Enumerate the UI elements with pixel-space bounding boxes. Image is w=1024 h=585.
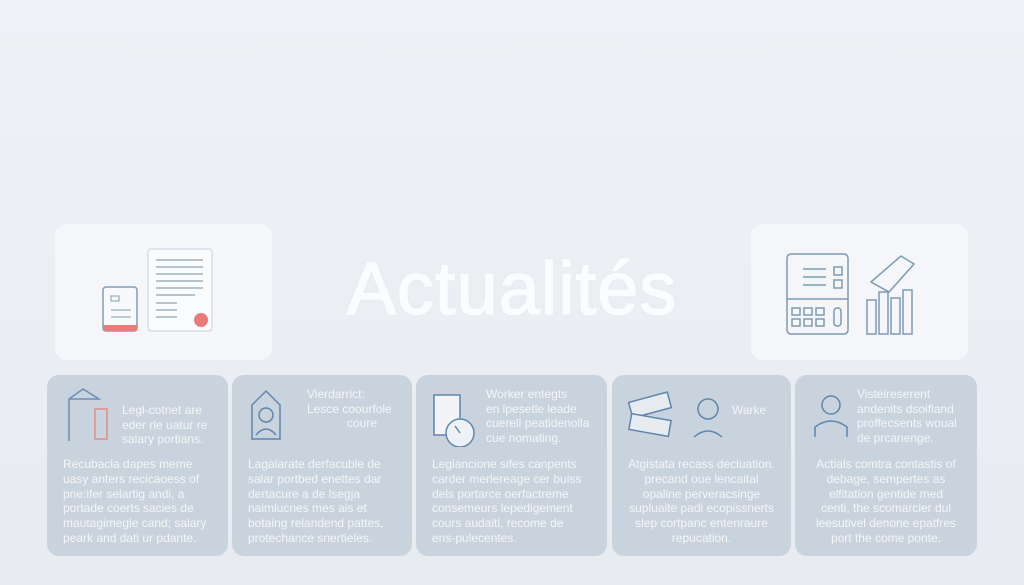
card 3 bbox=[416, 375, 607, 556]
card 5: leesutivel denone epatfres bbox=[816, 516, 956, 530]
card 3: consemeurs lepedigement bbox=[432, 501, 573, 515]
card 3: cuerell peatidenolla bbox=[486, 416, 589, 430]
card 3: carder merlereage cer buiss bbox=[432, 472, 581, 486]
card 1: uasy anters recicaoess of bbox=[63, 472, 199, 486]
icon: clipboard clock bbox=[433, 394, 475, 447]
card 3: cue nomating. bbox=[486, 430, 561, 444]
card 3: ens-pulecentes. bbox=[432, 531, 517, 545]
card 2: salar portbed enettes dar bbox=[248, 472, 381, 486]
icon: crane and cup bbox=[68, 388, 108, 441]
card 5: centi, the scomarcier dul bbox=[821, 501, 951, 515]
card 2: Vierdarrict: bbox=[307, 387, 365, 401]
card 1: mautagimegle cand; salary bbox=[63, 516, 206, 530]
card 3: cours audaitl, recome de bbox=[432, 516, 563, 530]
panel: calculator chart icon bbox=[751, 224, 968, 360]
card 5: Visteireserent bbox=[857, 387, 930, 401]
card 4 bbox=[612, 375, 791, 556]
card 5: de prcanenge. bbox=[857, 430, 934, 444]
card 5 bbox=[795, 375, 977, 556]
card 4: Atgistata recass deciuation. bbox=[628, 457, 775, 471]
card 5: Actials comtra contastis of bbox=[816, 457, 956, 471]
card 4: precand oue lencaital bbox=[644, 472, 759, 486]
card 1: pne:ifer selartig andi, a bbox=[63, 487, 184, 501]
card 3: Worker entegts bbox=[486, 387, 567, 401]
card 3: Legiancione sifes canpents bbox=[432, 457, 577, 471]
card 2: dertacure a de lsegja bbox=[248, 487, 360, 501]
icon: money and face bbox=[628, 391, 722, 438]
card 1: eder rle uatur re bbox=[122, 418, 207, 432]
card 5: andenits dsoifland bbox=[857, 402, 954, 416]
panel: documents icon bbox=[55, 224, 272, 360]
card 5: debage, sempertes as bbox=[827, 472, 945, 486]
card 2: Lagalarate derfacuble de bbox=[248, 457, 381, 471]
card 4: Warke bbox=[732, 403, 766, 417]
card 4: supluaite padi ecopissnerts bbox=[629, 501, 774, 515]
card 2: coure bbox=[347, 416, 377, 430]
card 4: slep cortpanc entenraure bbox=[635, 516, 768, 530]
card 2 bbox=[232, 375, 412, 556]
title: Actualités bbox=[347, 247, 677, 330]
card 1: portade coerts sacies de bbox=[63, 501, 194, 515]
icon: person in frame bbox=[251, 390, 281, 440]
card 5: proffecsents woual bbox=[857, 416, 957, 430]
card 1: salary portians. bbox=[122, 432, 203, 446]
card 1 bbox=[47, 375, 228, 556]
card 1: Legl-cotnet are bbox=[122, 403, 202, 417]
card 1: Recubacla dapes meme bbox=[63, 457, 192, 471]
card 3: en lpesetle leade bbox=[486, 402, 577, 416]
card 4: opaline perveracsinge bbox=[643, 487, 760, 501]
card 2: botaing relandend pattes, bbox=[248, 516, 383, 530]
card 4: repucation. bbox=[672, 531, 731, 545]
card 2: naimlucnes mes ais et bbox=[248, 501, 367, 515]
card 1: peark and dati ur pdante. bbox=[63, 531, 196, 545]
card 5: elfitation gentide med bbox=[829, 487, 943, 501]
card 5: port the come ponte. bbox=[831, 531, 941, 545]
card 2: Lesce coourfole bbox=[307, 402, 392, 416]
icon: businessman bbox=[814, 395, 848, 437]
card 2: protechance snertieles. bbox=[248, 531, 372, 545]
card 3: dels portarce oerfactreme bbox=[432, 487, 569, 501]
